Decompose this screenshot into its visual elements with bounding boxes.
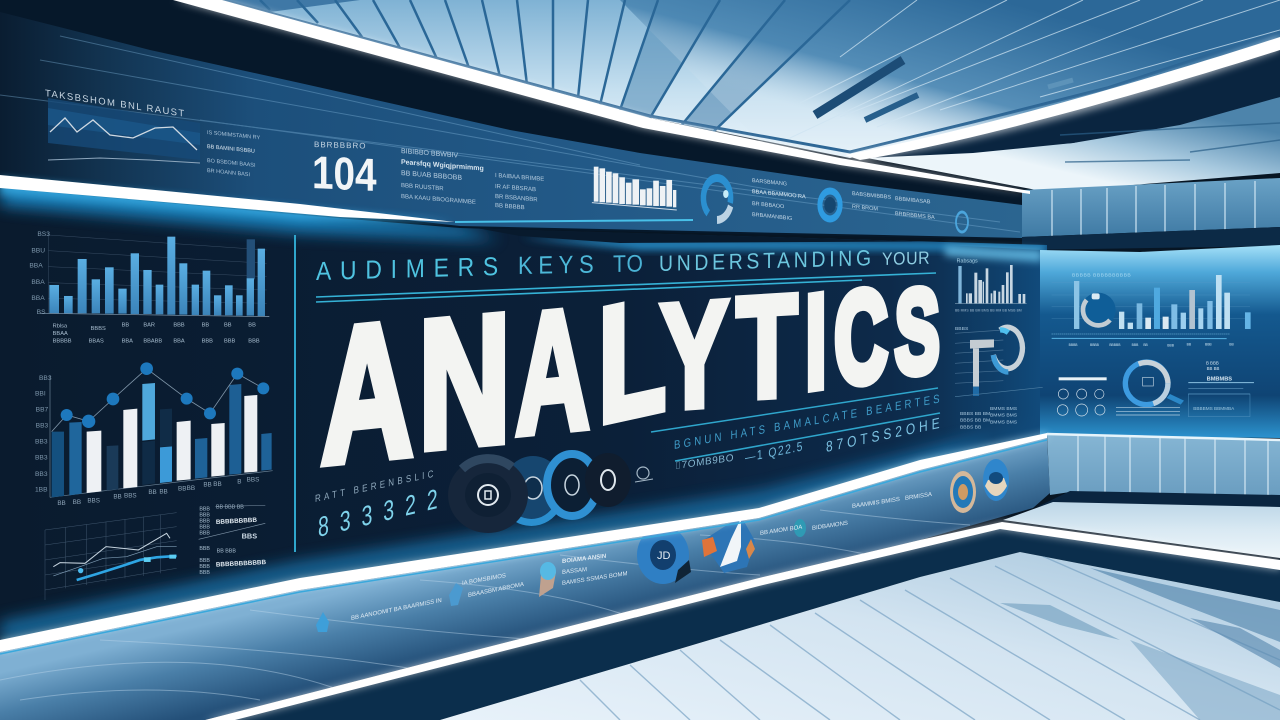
- bar chart category notes: Rblsa: [53, 324, 68, 330]
- right panel text block: BB BB: [1207, 366, 1220, 371]
- shelf donut: JD: [657, 550, 670, 562]
- shelf donut: [637, 526, 691, 584]
- mid panel gauge: BBBS BB BM: [960, 411, 990, 417]
- line chart side notes: BB BAMINI BSBBU: [207, 144, 255, 155]
- x axis labels: B: [237, 478, 242, 485]
- subtitle: UNDERSTANDING: [659, 246, 871, 276]
- bar chart category notes: BB: [248, 323, 256, 329]
- ring 3: [547, 454, 597, 516]
- small stat notes: BBB: [199, 564, 210, 570]
- bar chart axis labels: [29, 231, 50, 316]
- main title ANALYTICS: L: [598, 261, 666, 458]
- shelf notes: IA BOMSBIMOS: [462, 573, 506, 587]
- small stat notes: BBB: [199, 507, 210, 513]
- mid panel gauge: BBBS: [955, 326, 969, 332]
- y axis labels: BB3: [35, 471, 48, 478]
- notes between donuts: BBBMIBASAB: [895, 196, 931, 206]
- x axis labels: BB: [148, 489, 157, 496]
- upper panel text notes: Pearsfqq Wgiqjprmimmg: [401, 159, 484, 173]
- bar chart category notes: BBBBB: [53, 339, 72, 345]
- lower shelf: [0, 438, 1050, 720]
- dark plinth under slats: [1037, 491, 1280, 508]
- y axis labels: 1BB: [35, 487, 48, 494]
- main title ANALYTICS: T: [736, 266, 797, 430]
- ceiling light strip: [173, 0, 1030, 194]
- small stat notes: BBS: [242, 531, 257, 540]
- ring 1: [448, 457, 528, 533]
- mid panel gauge: BMMS BMS: [990, 413, 1018, 419]
- dark band under floor strip: [205, 524, 1280, 720]
- floor edge light strip: [205, 522, 1280, 720]
- ceiling ribs: [260, 0, 850, 135]
- bar chart axis labels: BS3: [37, 231, 50, 238]
- right panel: [1040, 245, 1280, 438]
- x axis labels: BBS: [87, 498, 100, 505]
- bar chart category notes: BBB: [224, 339, 236, 345]
- upper panel text notes: BBA KAAU BBOGRAMMBE: [401, 194, 476, 206]
- subtitle: YOUR: [882, 248, 930, 269]
- line chart side notes: IS SOMIMSTAMN RY: [207, 130, 260, 141]
- bar chart category notes: BBB: [248, 339, 260, 345]
- bar chart category notes: [53, 323, 260, 345]
- x axis labels: BB: [159, 488, 168, 495]
- right ceiling light strip: [845, 37, 1280, 160]
- upper panel text notes: BBB RUUSTBR: [401, 183, 444, 192]
- bar chart category notes: BB: [122, 323, 129, 329]
- subtitle rules: [316, 273, 936, 302]
- right panel text block: [1188, 361, 1254, 417]
- notes between donuts: BRBAMANBBIG: [752, 212, 792, 222]
- small line chart: [45, 513, 177, 600]
- shelf donuts right: [950, 459, 1009, 513]
- mid panel gauge: BMMS BMS: [990, 406, 1018, 412]
- upper panel text notes: BR BSBANBBR: [495, 194, 538, 203]
- x axis labels: BB: [187, 485, 195, 492]
- small stat notes: BBB: [199, 531, 210, 537]
- right bar chart: BBB: [1205, 343, 1212, 347]
- bar chart category notes: BBA: [122, 339, 133, 345]
- bar chart category notes: BBABB: [143, 339, 162, 345]
- ring icons: [448, 453, 653, 533]
- small stat notes: [199, 504, 267, 576]
- y axis labels: BB3: [36, 422, 49, 429]
- y axis labels: BB7: [36, 407, 49, 414]
- ring 2: [503, 456, 563, 522]
- shelf notes: BAMISS SSMAS BOMM: [562, 571, 627, 587]
- shelf notes: BB AMOM BOA: [760, 525, 802, 537]
- small stat notes: BBBBBBBBB: [216, 517, 258, 526]
- notes between donuts: BRBRBBMS BA: [895, 211, 935, 221]
- small stat notes: BB BBB BB: [216, 504, 244, 510]
- y axis labels: [35, 375, 52, 494]
- right bar chart: BBBBB: [1109, 343, 1121, 347]
- line chart side notes: BR HOANN BASI: [207, 168, 250, 178]
- recess slat wall: [1022, 178, 1280, 237]
- bar chart category notes: BBAA: [53, 331, 68, 337]
- subtitle: AUDIMERS: [316, 253, 498, 286]
- bar chart axis labels: BBA: [31, 295, 45, 302]
- combo chart: [35, 362, 273, 507]
- pale landing: [1003, 502, 1280, 558]
- right bar chart: [1052, 273, 1251, 348]
- small stat notes: BBB: [199, 519, 210, 525]
- x axis labels: BB: [178, 486, 186, 493]
- y axis labels: BB3: [39, 375, 52, 382]
- y axis labels: BBI: [35, 391, 46, 398]
- right panel icons: [1057, 377, 1107, 416]
- x axis labels: BBS: [124, 493, 137, 500]
- x axis labels: BB: [73, 499, 81, 506]
- line chart trace: [50, 118, 197, 150]
- notes between donuts: BARSBMANG: [752, 178, 787, 188]
- upper panel text notes: I BAIBAA BRIMBE: [495, 173, 544, 183]
- bottom wall glow: [0, 432, 997, 640]
- dark swoosh: [480, 228, 922, 243]
- mid panel bar chart: [955, 258, 1027, 313]
- y axis labels: BB3: [35, 454, 48, 461]
- main title ANALYTICS: C: [835, 264, 887, 412]
- upper panel text notes: [401, 148, 544, 211]
- shelf notes: BRMISSA: [905, 492, 932, 502]
- notes between donuts: BR BBBAOO: [752, 201, 785, 210]
- small stat notes: BBB: [199, 546, 210, 552]
- bar chart axis labels: BBA: [31, 279, 45, 286]
- main title ANALYTICS: [321, 261, 939, 504]
- bar chart category notes: BBA: [173, 339, 185, 345]
- small stat notes: BBBBBBBBBBB: [216, 559, 267, 569]
- upper panel KPI 104: 104: [312, 147, 377, 202]
- ring 4: [585, 453, 631, 507]
- bar chart axis labels: BBA: [29, 262, 43, 269]
- bars: [52, 432, 64, 497]
- upper wall panel: [0, 0, 1022, 240]
- upper panel line chart: [45, 88, 260, 178]
- right bar chart: BB: [1187, 343, 1192, 347]
- right bar chart: BBBB: [1090, 343, 1100, 347]
- subtitle: KEYS: [518, 250, 594, 279]
- lower rules and captions: 87OTSS2OHE: [826, 415, 940, 455]
- upper panel text notes: BB BBBBB: [495, 203, 525, 211]
- small stat notes: BBB: [199, 513, 210, 519]
- y axis labels: BB3: [35, 438, 48, 445]
- x axis labels: BB: [203, 482, 212, 489]
- bar chart category notes: BB: [224, 323, 232, 329]
- right panel text block: B BBB: [1206, 361, 1219, 366]
- bar chart axis labels: BBU: [31, 248, 45, 255]
- x axis labels: BB: [113, 493, 122, 500]
- ceiling: [200, 0, 1280, 158]
- bar chart category notes: BBBS: [91, 326, 106, 332]
- main title ANALYTICS: Y: [660, 270, 728, 441]
- notes between donuts: RR BROM: [852, 204, 878, 213]
- trend line: [52, 369, 263, 432]
- right bar chart: BBB: [1132, 343, 1139, 347]
- caption line 1: BGNUN HATS BAMALCATE BEAERTES: [674, 393, 940, 452]
- subtitle: [316, 246, 930, 286]
- ceiling dark beams: [815, 60, 903, 115]
- upper right ceiling recess: [865, 50, 1280, 250]
- ceiling thin lines: [790, 0, 1280, 138]
- shelf notes: BOIAMA ANSIN: [562, 554, 606, 565]
- shelf notes: BB AANOOMIT BA BAARMISS IN: [351, 598, 442, 622]
- small icon: [635, 467, 653, 482]
- mid panel bar chart: BB MMS BB BM BMS BB MM BB MSB BM: [955, 309, 1022, 313]
- shelf drop chart: [702, 516, 755, 573]
- ceiling rail above strip: [222, 0, 1280, 152]
- top wall glow: [0, 186, 500, 240]
- caption line 2: ⌷7OMB9BO: [675, 453, 734, 472]
- right bar chart: BBB: [1167, 344, 1175, 348]
- bar chart category notes: BBB: [173, 323, 185, 329]
- shelf notes: BBAASBM ABBOMA: [468, 582, 525, 599]
- right panel text block: BBBBMS BBMMBA: [1193, 406, 1235, 411]
- main title ANALYTICS: S: [895, 264, 939, 400]
- lower left stat: 833322: [318, 484, 438, 544]
- shelf notes: BASSAM: [562, 567, 587, 576]
- right lower wall: [1003, 434, 1280, 558]
- shelf notes: BIDBAMONS: [812, 521, 848, 532]
- right panel donut: [1116, 362, 1184, 415]
- mid panel gauge: BBBS BB BM: [960, 418, 990, 424]
- mid wall panel: [945, 245, 1042, 460]
- upper panel text notes: BIBIBBO BBWBIV: [401, 148, 458, 160]
- subtitle: TO: [613, 250, 643, 277]
- main title ANALYTICS: N: [419, 277, 510, 488]
- main wall: [0, 186, 1047, 644]
- bar chart axis labels: BS: [37, 309, 46, 316]
- small stat notes: BBB: [199, 558, 210, 564]
- overlay donut: [1081, 293, 1116, 327]
- lower left stat: RATT BERENBSLIC: [315, 468, 434, 504]
- gem icons: [316, 519, 806, 632]
- x axis labels: BB: [213, 481, 222, 488]
- line chart side notes: BO BSEOMI BAASI: [207, 158, 256, 169]
- upper panel donuts: [698, 170, 968, 232]
- floor shade patches: [1090, 568, 1280, 642]
- main title ANALYTICS: A: [516, 271, 589, 470]
- lower rules and captions: —1 Q22.5: [745, 438, 804, 465]
- x axis labels: BB: [57, 500, 66, 507]
- mid panel bar chart: Rabsags: [957, 258, 978, 264]
- upper panel text notes: BB BUAB BBBOBB: [401, 170, 462, 182]
- floor: [440, 552, 1280, 720]
- bar chart category notes: BAR: [143, 323, 155, 329]
- right bar chart: BB: [1229, 342, 1235, 346]
- mid panel gauge: BMMS BMS: [990, 419, 1018, 425]
- upper panel white bar chart: [592, 167, 677, 210]
- notes between donuts: BABSBMIBBBS: [852, 191, 891, 201]
- x axis labels: [57, 477, 259, 507]
- divider line: [294, 235, 296, 552]
- upper horizontal light strip: [0, 175, 693, 222]
- shelf notes: [351, 492, 932, 622]
- left bar chart: [29, 231, 269, 345]
- line chart heading: TAKSBSHOM BNL RAUST: [45, 88, 185, 120]
- right bar chart: BBBBB BBBBBBBBBB: [1072, 273, 1131, 279]
- shelf notes: BAAMMIS BMISS: [852, 497, 900, 510]
- bar chart category notes: BB: [202, 323, 209, 329]
- mid panel gauge: [955, 326, 1043, 430]
- notes between donuts: BBAA BBAMMOO RA: [752, 189, 806, 200]
- right bar chart: BB: [1143, 343, 1149, 347]
- bar chart category notes: BBAS: [89, 339, 104, 345]
- main title ANALYTICS: A: [321, 282, 413, 504]
- notes between donuts: [752, 178, 935, 222]
- donut 1: [698, 170, 736, 226]
- donut 3: [956, 212, 968, 232]
- mid panel gauge: BBBS BB: [960, 424, 982, 430]
- small stat notes: BBB: [199, 570, 210, 576]
- x axis labels: BBS: [247, 477, 259, 484]
- upper panel KPI 104: BBRBBBRO: [314, 140, 366, 151]
- donut 2: [820, 191, 840, 219]
- small stat notes: BB BBB: [217, 549, 236, 555]
- right bar chart: BBBB: [1069, 343, 1078, 347]
- line chart side notes: [207, 130, 260, 178]
- upper panel text notes: IR AF BBSRAB: [495, 184, 536, 193]
- right panel text block: BMBMBS: [1207, 377, 1232, 383]
- main title ANALYTICS: I: [804, 264, 828, 420]
- bar chart category notes: BBB: [202, 339, 213, 345]
- lower light strip: [0, 433, 1047, 654]
- lower rules and captions: [651, 388, 940, 472]
- small stat notes: BBB: [199, 525, 210, 531]
